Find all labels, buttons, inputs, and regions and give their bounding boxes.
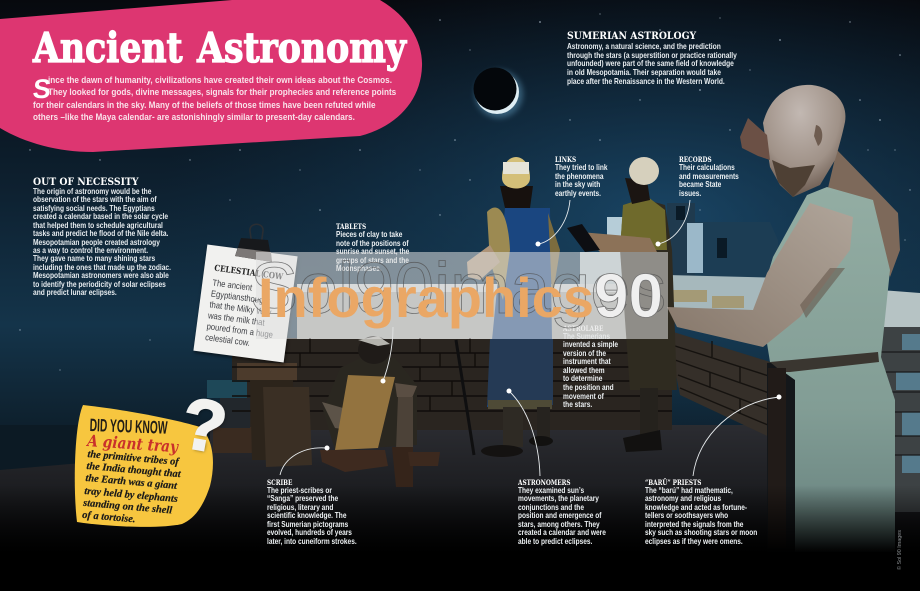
note text: poured from a huge — [206, 321, 273, 339]
body: Out of Necessity: to identify the periodicity of solar eclipses — [33, 280, 166, 289]
body: Sumerian Astrology: through the stars (a superstition or practice rationally — [567, 50, 737, 60]
did you know text: the Earth was a giant — [85, 473, 177, 492]
did you know label: DID YOU KNOW — [89, 415, 168, 438]
text block: Astrolabe: invented a simple — [563, 340, 618, 349]
figure: astronomer in blue — [467, 157, 560, 457]
watermark text: Infographics90 — [258, 262, 663, 331]
did you know callout — [74, 405, 213, 527]
floor — [0, 425, 920, 591]
note text: celestial cow. — [204, 332, 250, 347]
text block: Astronomers: ASTRONOMERS — [518, 478, 571, 486]
text block: Tablets: Moonsphases. — [336, 264, 382, 273]
image credit: © Sol 90 Images — [897, 530, 903, 570]
text block: Links: LINKS — [555, 155, 576, 164]
did you know text: of a tortoise. — [82, 510, 136, 525]
text block: Astrolabe: instrument that — [563, 357, 611, 366]
did you know text: standing on the shell — [83, 498, 173, 516]
text block: Baru priests: tellers or soothsayers who — [645, 511, 728, 520]
body: Out of Necessity: Mesopotamian people created astrology — [33, 238, 160, 247]
intro paragraph — [31, 74, 396, 123]
note text — [204, 277, 273, 347]
text block: Scribe: religious, literary and — [267, 503, 333, 512]
text block: Astrolabe: allowed them — [563, 366, 605, 375]
did you know text: the India thought that — [86, 461, 181, 480]
text block: Astronomers: position and emergence of — [518, 511, 601, 520]
body: Out of Necessity: tasks and predict he flood of the Nile delta. — [33, 229, 168, 238]
note card: Celestial cow — [193, 244, 297, 362]
note text: that the Milky Way — [208, 299, 271, 317]
note text: was the milk that — [207, 310, 265, 327]
icon: question mark: ? — [175, 383, 233, 469]
heading: Sumerian Astrology: SUMERIAN ASTROLOGY — [567, 31, 696, 42]
text block: Tablets: groups of stars and the — [336, 256, 409, 265]
note text: The ancient — [211, 277, 252, 292]
text block: Baru priests: interpreted the signals from the — [645, 520, 743, 529]
intro paragraph: others –like the Maya calendar- are astonishingly similar to present-day calendars. — [33, 112, 355, 123]
body: Out of Necessity: Mesopotamian astronomers were also able — [33, 271, 169, 280]
text block: Tablets — [336, 222, 410, 273]
did you know headline: A giant tray — [87, 431, 179, 456]
text block: Astronomers: They examined sun’s — [518, 486, 584, 494]
right brick wall — [667, 275, 920, 512]
text block: Astronomers: movements, the planetary — [518, 494, 599, 503]
text block: Astronomers: stars, among others. They — [518, 520, 600, 529]
body: Out of Necessity: They gave name to many shining stars — [33, 254, 155, 263]
text block: Links: earthly events. — [555, 189, 601, 198]
body: Out of Necessity: The origin of astronomy would be the — [33, 187, 151, 196]
title banner: pink shape — [0, 0, 422, 152]
text block: Scribe: “Sanga” preserved the — [267, 494, 338, 503]
text block: Astronomers — [518, 478, 606, 546]
text block: Baru priests: sky such as shooting stars or moon — [645, 528, 757, 537]
body: Sumerian Astrology: unfounded) were part of the same field of knowledge — [567, 58, 734, 68]
text block: Astronomers: conjunctions and the — [518, 503, 584, 512]
text block: Astrolabe — [563, 324, 618, 409]
text block: Links: in the sky with — [555, 180, 600, 189]
text block: Tablets: note of the positions of — [336, 239, 409, 248]
figure: seated scribe — [250, 336, 440, 487]
text block: Links: the phenomena — [555, 172, 603, 181]
text block: Scribe: later, into cuneiform strokes. — [267, 537, 357, 546]
text block: Scribe: SCRIBE — [267, 478, 292, 486]
text block: Tablets: sunrise and sunset, the — [336, 247, 409, 256]
body: Out of Necessity: observation of the stars with the aim of — [33, 195, 157, 204]
text block: Out of Necessity — [33, 177, 171, 297]
intro paragraph: S — [31, 74, 53, 104]
distant buildings — [580, 203, 778, 287]
did you know text — [82, 449, 182, 525]
heading: Out of Necessity: OUT OF NECESSITY — [33, 177, 139, 188]
stars — [19, 13, 911, 371]
text block: Baru priests: astronomy and religious — [645, 494, 721, 503]
text block: Links — [555, 155, 608, 198]
body: Out of Necessity: satisfying social needs. The Egyptians — [33, 204, 155, 213]
text block: Tablets: Pieces of clay to take — [336, 230, 402, 239]
text block: Baru priests: “BARÛ” PRIESTS — [645, 478, 701, 486]
body: Out of Necessity: created a calendar based in the solar cycle — [33, 212, 168, 221]
text block: Tablets: TABLETS — [336, 222, 366, 231]
body: Sumerian Astrology: place after the Renaissance in the Western World. — [567, 76, 725, 86]
text block: Records: Their calculations — [679, 163, 735, 172]
intro paragraph: ince the dawn of humanity, civilizations have created their own ideas about the Cosmos. — [48, 75, 392, 86]
note heading: CELESTIAL COW — [213, 263, 283, 282]
text block: Scribe: scientific knowledge. The — [267, 511, 346, 520]
figure: priest with tablet — [567, 157, 677, 452]
title: Ancient Astronomy — [33, 24, 406, 72]
text block: Links: They tried to link — [555, 163, 607, 172]
body: Out of Necessity: as a way to control the environment. — [33, 246, 148, 255]
text block: Records: became State — [679, 180, 721, 189]
text block: Records: and measurements — [679, 172, 739, 181]
text block: Astronomers: able to predict eclipses. — [518, 537, 592, 546]
text block: Astrolabe: ASTROLABE — [563, 324, 603, 332]
text block: Records: issues. — [679, 189, 701, 198]
intro paragraph: They looked for gods, divine messages, signals for their prophecies and reference points — [48, 87, 396, 98]
bottom fade — [0, 485, 920, 553]
body: Out of Necessity — [33, 187, 171, 297]
text block: Baru priests: eclipses as if they were omens. — [645, 537, 743, 546]
body: Sumerian Astrology — [567, 41, 737, 86]
note text: Egyptiansthought — [210, 288, 270, 305]
text block: Astrolabe: the position and — [563, 383, 614, 392]
text block: Sumerian Astrology — [567, 31, 737, 86]
did you know text: the primitive tribes of — [87, 449, 179, 468]
text block: Records — [679, 155, 739, 198]
text block: Scribe: first Sumerian pictograms — [267, 520, 348, 529]
text block: Scribe: evolved, hundreds of years — [267, 528, 352, 537]
body: Sumerian Astrology: in old Mesopotamia. Their separation would take — [567, 67, 721, 77]
crescent moon — [474, 68, 523, 118]
text block: Baru priests — [645, 478, 757, 546]
text block: Scribe: The priest-scribes or — [267, 486, 332, 494]
text block: Astrolabe: the stars. — [563, 400, 592, 409]
text block: Astrolabe: movement of — [563, 392, 604, 401]
text block: Baru priests: The “barú” had mathematic, — [645, 486, 733, 494]
text block: Scribe — [267, 478, 357, 546]
icon: binder clip — [235, 224, 272, 262]
body: Out of Necessity: including the ones that made up the zodiac. — [33, 263, 171, 272]
text block: Baru priests: knowledge and acted as fortune- — [645, 503, 747, 512]
intro paragraph: for their calendars in the sky. Many of the beliefs of those times have been refuted while — [33, 100, 376, 111]
figure: Baru priest foreground — [667, 85, 900, 555]
leader lines and dots — [280, 200, 779, 476]
body: Out of Necessity: and predict lunar eclipses. — [33, 288, 117, 297]
watermark panel — [256, 252, 668, 339]
text block: Astrolabe: version of the — [563, 349, 606, 358]
body: Sumerian Astrology: Astronomy, a natural science, and the prediction — [567, 41, 721, 51]
text block: Astrolabe: to determine — [563, 374, 602, 383]
text block: Astrolabe: The Sumerians — [563, 332, 610, 340]
text block: Astronomers: created a calendar and were — [518, 528, 606, 537]
text block: Records: RECORDS — [679, 155, 712, 164]
body: Out of Necessity: that helped them to schedule agricultural — [33, 221, 163, 230]
back brick wall — [207, 284, 672, 455]
did you know text: tray held by elephants — [84, 485, 178, 505]
